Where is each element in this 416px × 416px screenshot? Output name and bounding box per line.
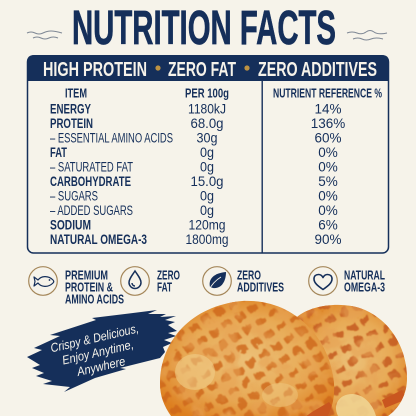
row labels: – ADDED SUGARS (50, 203, 133, 218)
icon: fish (29, 267, 57, 295)
feature label: zero fat: FAT (157, 280, 172, 294)
per 100g values (186, 102, 228, 247)
row labels: – SUGARS (50, 188, 98, 204)
per 100g values: 120mg (188, 218, 226, 232)
feature label: zero fat: ZERO (157, 268, 180, 282)
per 100g values: 1800mg (186, 232, 228, 247)
brush stroke banner (27, 310, 177, 392)
icon: right waves (347, 30, 387, 40)
feature label: zero additives (237, 268, 284, 294)
feature label: premium protein: PROTEIN & (65, 280, 113, 294)
nutrient reference values: 90% (314, 232, 342, 247)
feature label: zero additives: ZERO (237, 268, 261, 282)
column headers (65, 86, 382, 100)
feature label: premium protein (65, 268, 124, 306)
per 100g values: 0g (200, 203, 214, 218)
nutrient reference values: 6% (318, 218, 338, 232)
nutrient reference values: 60% (314, 130, 342, 146)
per 100g values: 30g (196, 130, 218, 146)
banner text: Crispy & Delicious, (49, 321, 140, 355)
banner text: Enjoy Anytime, (61, 337, 135, 368)
banner text: Anywhere (75, 354, 127, 379)
table frame (28, 56, 388, 253)
feature label: natural omega-3: OMEGA-3 (344, 280, 385, 294)
left hash brown patty (160, 300, 334, 416)
nutrient reference values: 136% (311, 116, 345, 131)
column headers: PER 100g (185, 86, 229, 100)
row labels: PROTEIN (50, 116, 93, 131)
right hash brown patty (297, 304, 407, 416)
nutrient reference values: 0% (318, 145, 338, 160)
nutrient reference values: 0% (318, 160, 338, 174)
nutrient reference values: 5% (318, 174, 338, 189)
feature label: premium protein: AMINO ACIDS (65, 292, 124, 306)
nutrient reference values: 0% (318, 188, 338, 204)
feature label: natural omega-3: NATURAL (344, 268, 385, 282)
nutrient reference values: 14% (314, 102, 342, 116)
icon: water drop (121, 267, 149, 295)
row labels: SODIUM (50, 218, 91, 232)
per 100g values: 1180kJ (188, 102, 226, 116)
banner text (49, 321, 147, 384)
per 100g values: 15.0g (190, 174, 224, 189)
row labels: – SATURATED FAT (50, 160, 133, 174)
icon: leaf (203, 267, 231, 295)
row labels (50, 102, 173, 247)
row labels: CARBOHYDRATE (50, 174, 131, 189)
feature label: natural omega-3 (344, 268, 385, 294)
column divider (262, 81, 263, 253)
nutrient reference values (311, 102, 345, 247)
row labels: NATURAL OMEGA-3 (50, 232, 147, 247)
heading band: HIGH PROTEIN (43, 59, 147, 81)
column headers: ITEM (65, 86, 87, 100)
heading band: ZERO FAT (168, 59, 236, 81)
feature label: zero additives: ADDITIVES (237, 280, 284, 294)
icon: left waves (27, 31, 62, 39)
row labels: – ESSENTIAL AMINO ACIDS (50, 130, 173, 146)
per 100g values: 0g (200, 160, 214, 174)
feature label: premium protein: PREMIUM (65, 268, 108, 282)
row labels: ENERGY (50, 102, 91, 116)
heading band (27, 55, 389, 81)
feature label: zero fat (157, 268, 180, 294)
per 100g values: 68.0g (190, 116, 224, 131)
nutrient reference values: 0% (318, 203, 338, 218)
per 100g values: 0g (200, 145, 214, 160)
per 100g values: 0g (200, 188, 214, 204)
nutrition table panel (27, 55, 389, 253)
row labels: FAT (50, 145, 68, 160)
icon: heart (309, 267, 337, 295)
